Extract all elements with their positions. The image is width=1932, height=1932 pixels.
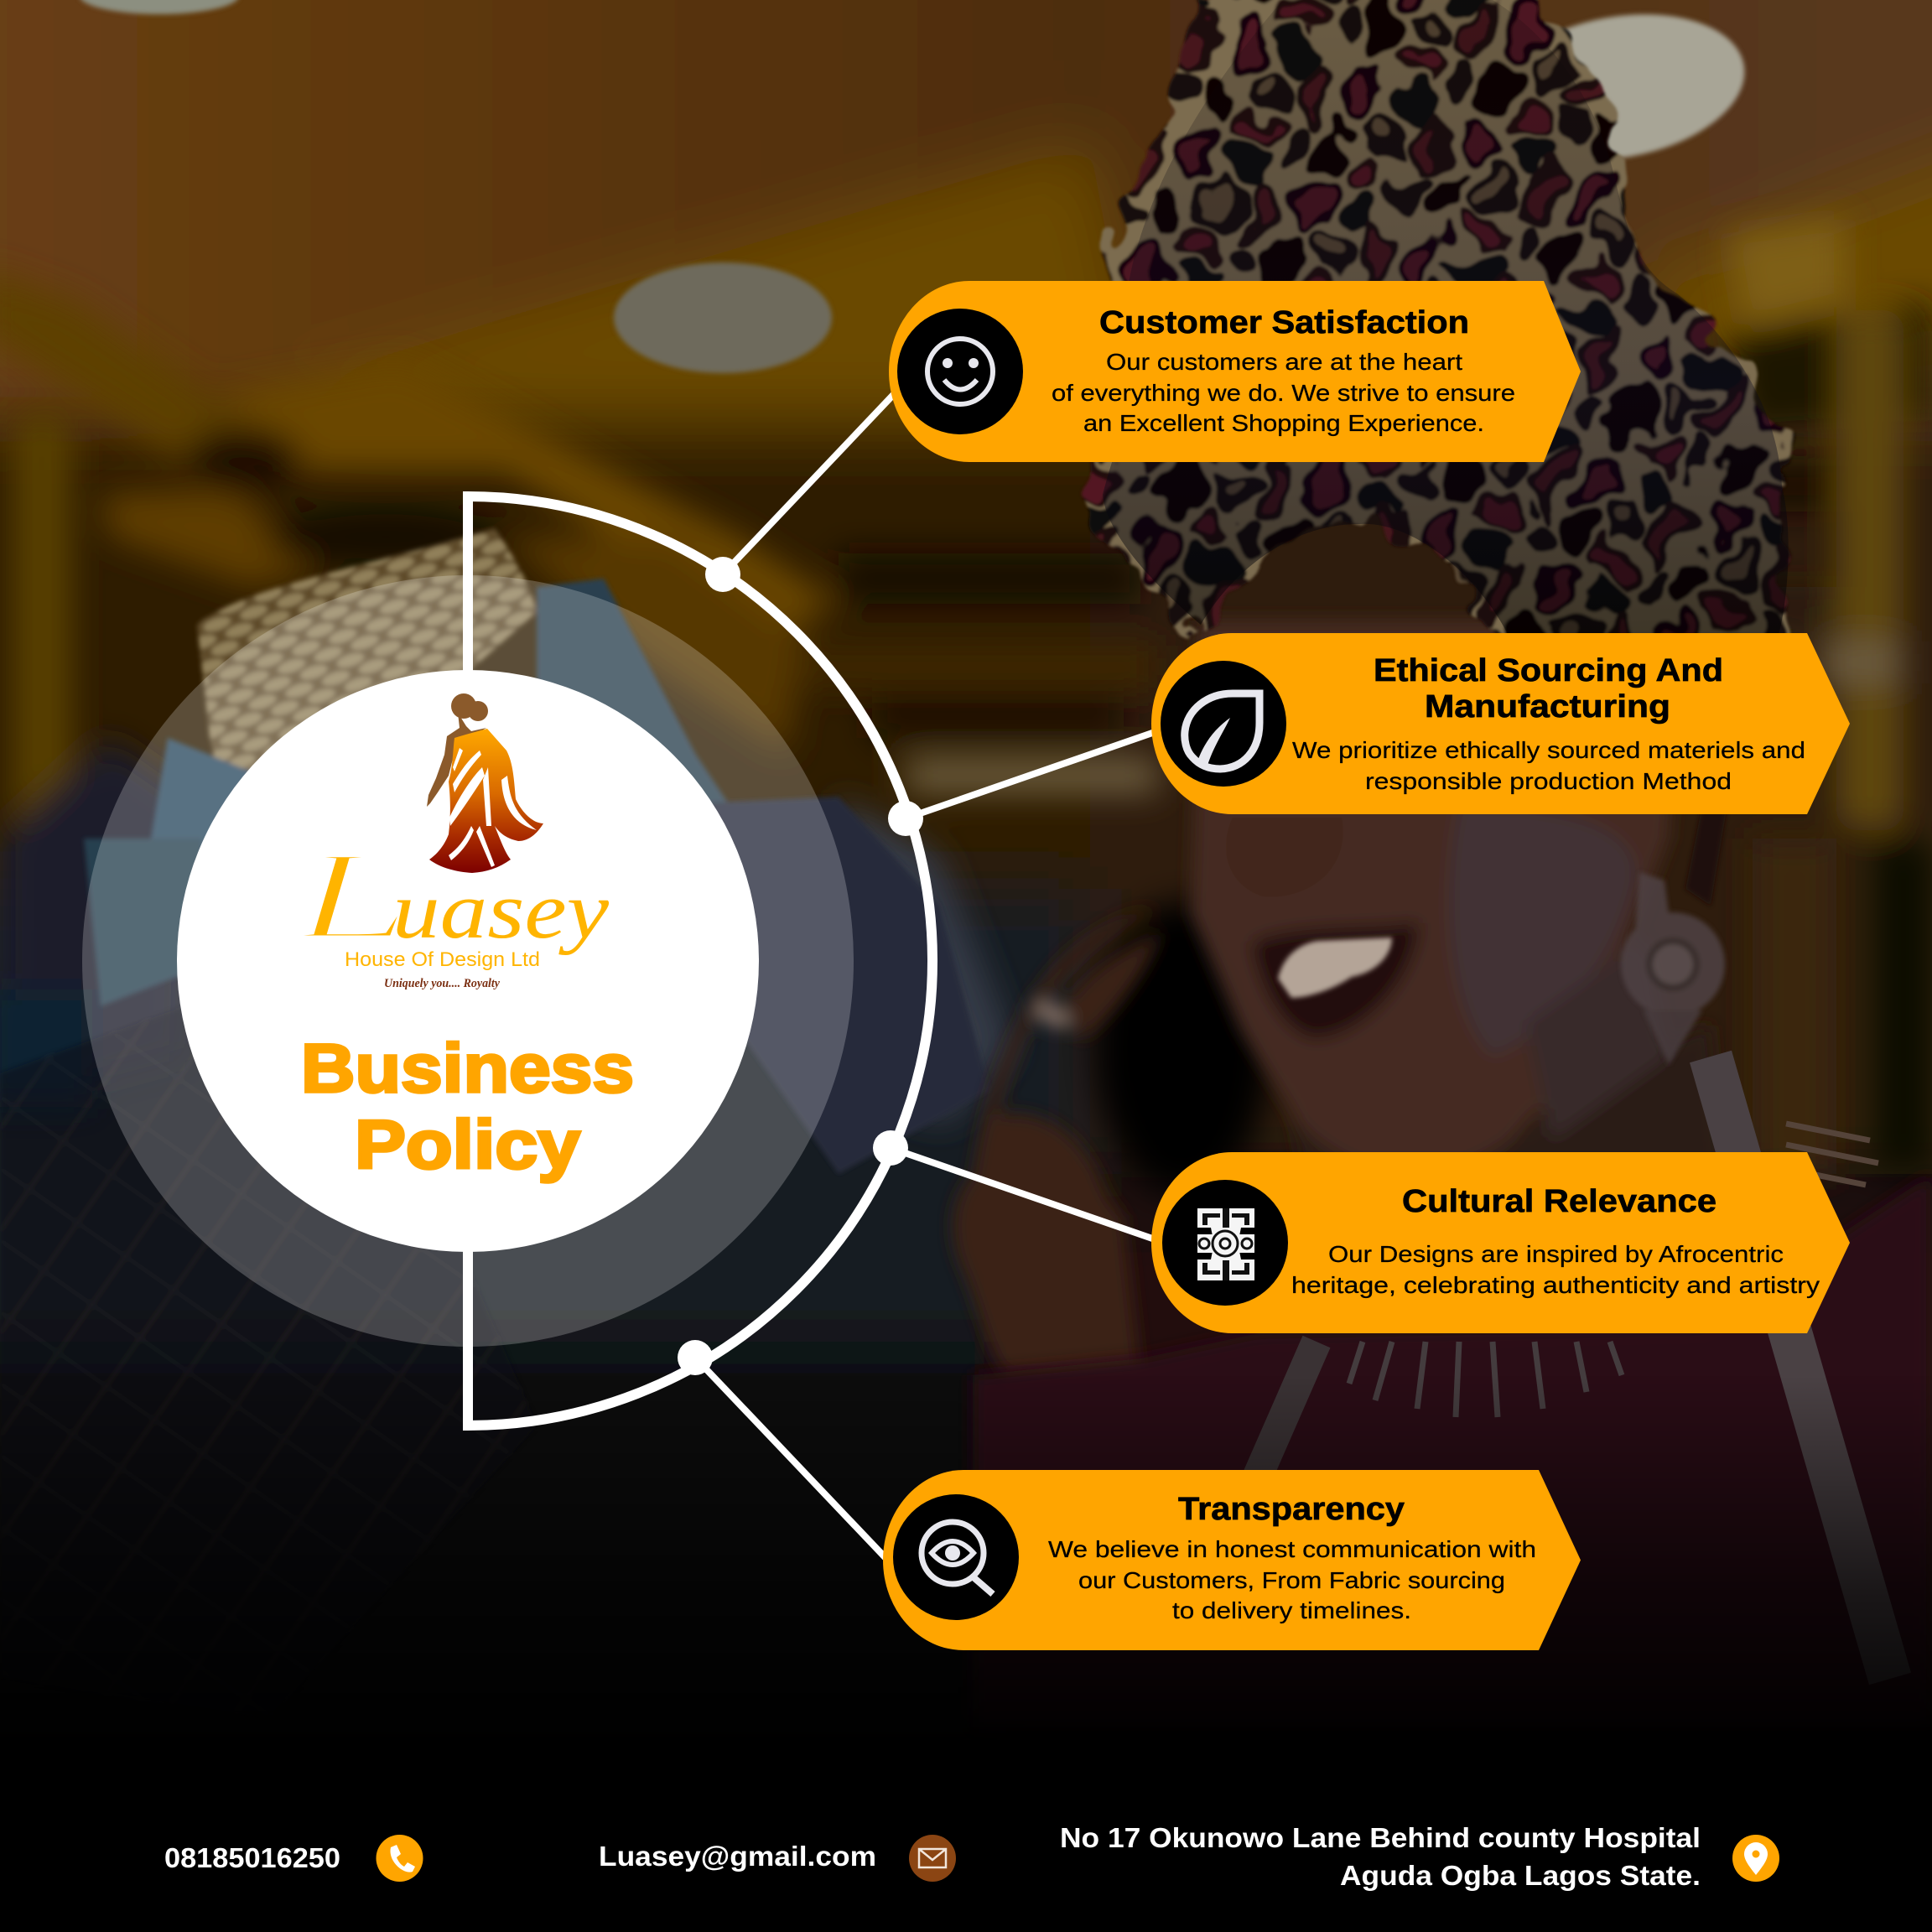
woman face [1191, 621, 1727, 1208]
heading: Business Policy [301, 1031, 634, 1183]
heading: Business Policy: Policy [355, 1107, 580, 1183]
bottom fade [0, 1375, 1932, 1769]
panel: Ethical Sourcing: responsible production Method [1365, 768, 1732, 794]
panel: Customer Satisfaction: of everything we do. We strive to ensure [1052, 380, 1515, 406]
panel: Customer Satisfaction: Our customers are at the heart [1106, 349, 1462, 375]
panel: Transparency: We believe in honest communication with [1048, 1536, 1536, 1562]
panel: Cultural Relevance: heritage, celebrating authenticity and artistry [1291, 1272, 1820, 1298]
footer: phone: 08185016250 [164, 1842, 340, 1873]
logo wordmark: uasey [392, 865, 609, 955]
teeth [1278, 937, 1392, 998]
woman clothing [973, 1174, 1932, 1727]
ceiling lights [80, 0, 1756, 373]
icon: location pin [1732, 1835, 1779, 1882]
icon: leaf [1185, 693, 1259, 769]
logo wordmark: Uniquely you.... Royalty [384, 977, 500, 990]
connector lines [695, 394, 1157, 1561]
woman arm and hand [953, 910, 1161, 1375]
panel: Ethical Sourcing: We prioritize ethically sourced materiels and [1292, 737, 1805, 763]
panel: Cultural Relevance: Our Designs are inspired by Afrocentric [1328, 1241, 1784, 1267]
logo wordmark: L [292, 826, 412, 965]
central white circle [177, 670, 759, 1252]
measuring tapes and necklace [1258, 1057, 1890, 1679]
footer: address: No 17 Okunowo Lane Behind county Hospital [1060, 1822, 1701, 1853]
phone [1094, 901, 1270, 1195]
logo wordmark [292, 826, 609, 990]
icon: eye magnifier [922, 1522, 993, 1594]
panel: Transparency: Transparency [1178, 1492, 1405, 1527]
panel: Transparency: our Customers, From Fabric sourcing [1078, 1567, 1505, 1593]
panel: Transparency [883, 1470, 1581, 1650]
connector dots [678, 557, 923, 1375]
panel: Cultural Relevance [1151, 1152, 1850, 1333]
footer: phone [164, 1835, 423, 1882]
panel: Customer Satisfaction: an Excellent Shopping Experience. [1083, 410, 1484, 436]
panel: Ethical Sourcing [1151, 633, 1850, 814]
semicircle frame arc [468, 496, 932, 1426]
basket and blue cloth [84, 528, 989, 1174]
icon: cultural pattern [1197, 1208, 1254, 1280]
plaid jacket [0, 1006, 537, 1719]
panel: Cultural Relevance: Cultural Relevance [1402, 1184, 1716, 1219]
footer: email [599, 1835, 956, 1882]
logo wordmark: House Of Design Ltd [345, 948, 540, 971]
footer: email: Luasey@gmail.com [599, 1841, 876, 1872]
panel: Transparency: to delivery timelines. [1172, 1597, 1411, 1623]
icon: phone [376, 1835, 423, 1882]
panel: Ethical Sourcing: Manufacturing [1425, 689, 1670, 724]
footer: address [1060, 1822, 1779, 1891]
translucent outer circle [82, 575, 854, 1347]
earring [1621, 805, 1727, 1065]
panel: Customer Satisfaction: Customer Satisfaction [1099, 305, 1469, 340]
panel: Ethical Sourcing: Ethical Sourcing And [1374, 653, 1723, 688]
panel: Customer Satisfaction [889, 281, 1581, 462]
footer: address: Aguda Ogba Lagos State. [1340, 1860, 1701, 1891]
heading: Business Policy: Business [301, 1031, 634, 1107]
headwrap [1086, 0, 1789, 662]
icon: smiley [927, 339, 993, 404]
logo: woman in saree [427, 693, 543, 873]
icon: mail [909, 1835, 956, 1882]
